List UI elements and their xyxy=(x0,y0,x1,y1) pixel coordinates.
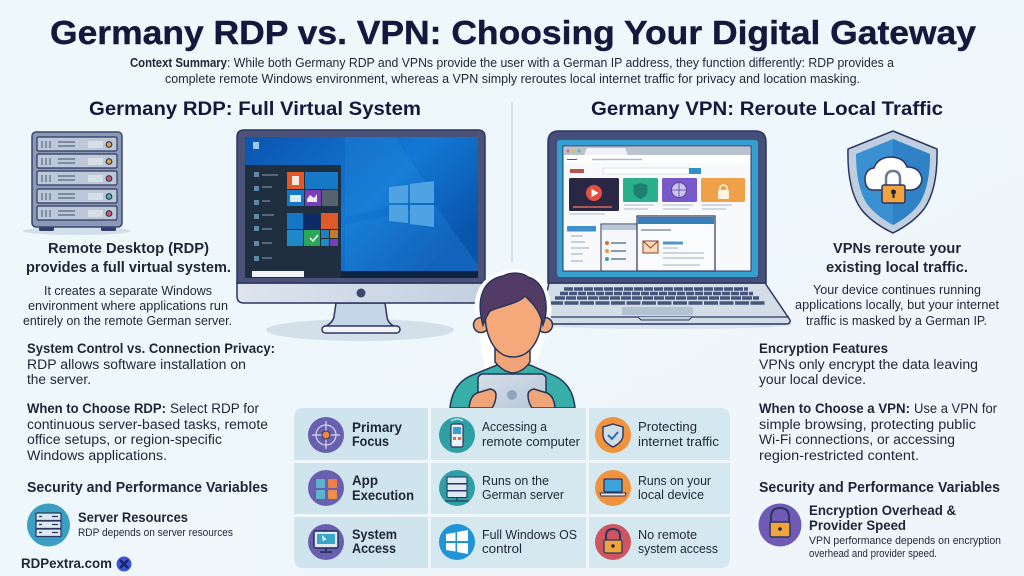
icon: encryption lock xyxy=(758,504,802,546)
text: VPN summary: Your device continues running xyxy=(813,282,981,297)
row: app execution: Execution xyxy=(352,487,414,503)
text: encryption features: your local device. xyxy=(759,372,866,387)
row: primary focus: Protecting xyxy=(638,419,697,434)
text: when to choose a VPN xyxy=(759,401,997,463)
text: system control vs connection privacy: the server. xyxy=(27,372,91,387)
row: app execution: local device xyxy=(638,487,704,502)
text: when to choose a VPN: simple browsing, protecting public xyxy=(759,417,976,432)
text: encryption overhead: VPN performance depends on encryption xyxy=(809,535,1001,547)
row: system access: system access xyxy=(638,541,718,556)
text: encryption features: VPNs only encrypt the data leaving xyxy=(759,357,978,372)
row: system access xyxy=(308,524,718,560)
text: when to choose RDP: When to Choose RDP: xyxy=(27,401,166,416)
row: app execution: App xyxy=(352,472,378,488)
context summary: Context Summary xyxy=(130,56,227,70)
text: encryption overhead: Provider Speed xyxy=(809,517,906,533)
text: encryption overhead: Encryption Overhead & xyxy=(809,502,956,518)
text: RDP summary: entirely on the remote German server. xyxy=(23,313,232,328)
text: VPN summary xyxy=(795,240,999,328)
text: VPN summary: VPNs reroute your xyxy=(833,240,961,257)
browser cards xyxy=(569,178,745,214)
row: system access: control xyxy=(482,541,522,556)
text: VPN summary: existing local traffic. xyxy=(826,259,968,276)
text: VPN summary: applications locally, but your internet xyxy=(795,297,999,312)
text: system control vs connection privacy: System Control vs. Connection Privacy: xyxy=(27,341,275,356)
text: when to choose RDP: Windows applications. xyxy=(27,448,167,463)
text: when to choose a VPN: Use a VPN for xyxy=(914,401,997,416)
title: Germany RDP vs. VPN: Choosing Your Digital Gateway xyxy=(50,14,977,51)
heading: VPN security and performance: Security and Performance Variables xyxy=(759,480,1000,496)
row: primary focus: remote computer xyxy=(482,434,581,449)
start menu xyxy=(245,165,341,278)
heading: RDP security and performance: Security and Performance Variables xyxy=(27,480,268,496)
row: primary focus xyxy=(308,417,720,453)
text: encryption features xyxy=(759,341,978,387)
row: system access: Access xyxy=(352,540,396,556)
brand: RDPextra.com: RDPextra.com xyxy=(21,556,112,571)
icon: server resources xyxy=(27,504,70,546)
text: server resources: Server Resources xyxy=(78,510,188,525)
heading: Germany VPN: Germany VPN: Reroute Local Traffic xyxy=(591,99,943,120)
text: system control vs connection privacy xyxy=(27,341,275,387)
context summary xyxy=(130,56,894,86)
text: system control vs connection privacy: RDP allows software installation on xyxy=(27,357,246,372)
comparison table xyxy=(294,408,730,568)
text: RDP summary: environment where applications run xyxy=(28,298,228,313)
text: when to choose RDP: office setups, or region-specific xyxy=(27,432,222,447)
windows logo wallpaper xyxy=(389,181,434,227)
text: RDP summary xyxy=(23,240,232,328)
text: when to choose a VPN: region-restricted content. xyxy=(759,448,919,463)
context summary: : While both Germany RDP and VPNs provide the user with a German IP address, they function differently: RDP provides a xyxy=(227,56,894,70)
keyboard xyxy=(549,289,766,303)
icon: shield with cloud and lock xyxy=(848,131,937,233)
text: server resources xyxy=(78,510,233,539)
row: system access: System xyxy=(352,526,397,542)
text: when to choose RDP: Select RDP for xyxy=(170,401,259,416)
row: app execution: Runs on your xyxy=(638,473,712,488)
text: when to choose a VPN: When to Choose a VPN: xyxy=(759,401,910,416)
illustration: desktop monitor with Windows xyxy=(237,130,485,341)
text: when to choose RDP: continuous server-based tasks, remote xyxy=(27,417,268,432)
text: encryption features: Encryption Features xyxy=(759,341,888,356)
text: RDP summary: It creates a separate Windows xyxy=(44,283,212,298)
icon: server rack xyxy=(23,132,131,235)
heading: Germany RDP: Germany RDP: Full Virtual System xyxy=(89,99,421,120)
row: system access: Full Windows OS xyxy=(482,527,577,542)
text: RDP summary: provides a full virtual system. xyxy=(26,259,231,276)
row: app execution: Runs on the xyxy=(482,473,549,488)
row: system access: No remote xyxy=(638,527,697,542)
row: app execution xyxy=(308,470,712,506)
context summary: complete remote Windows environment, whereas a VPN simply reroutes local internet traffic for privacy and location masking. xyxy=(165,72,860,86)
text: VPN summary: traffic is masked by a German IP. xyxy=(806,313,987,328)
illustration: laptop with browser xyxy=(544,131,792,329)
row: primary focus: Primary xyxy=(352,419,402,435)
row: app execution: German server xyxy=(482,487,565,502)
text: encryption overhead xyxy=(809,502,1001,560)
row: primary focus: Accessing a xyxy=(482,419,548,434)
text: when to choose RDP xyxy=(27,401,268,463)
text: encryption overhead: overhead and provider speed. xyxy=(809,548,937,560)
text: server resources: RDP depends on server resources xyxy=(78,527,233,539)
illustration: person with tablet xyxy=(450,271,575,410)
text: RDP summary: Remote Desktop (RDP) xyxy=(48,240,209,257)
row: primary focus: Focus xyxy=(352,433,389,449)
row: primary focus: internet traffic xyxy=(638,434,720,449)
text: when to choose a VPN: Wi-Fi connections, or accessing xyxy=(759,432,955,447)
